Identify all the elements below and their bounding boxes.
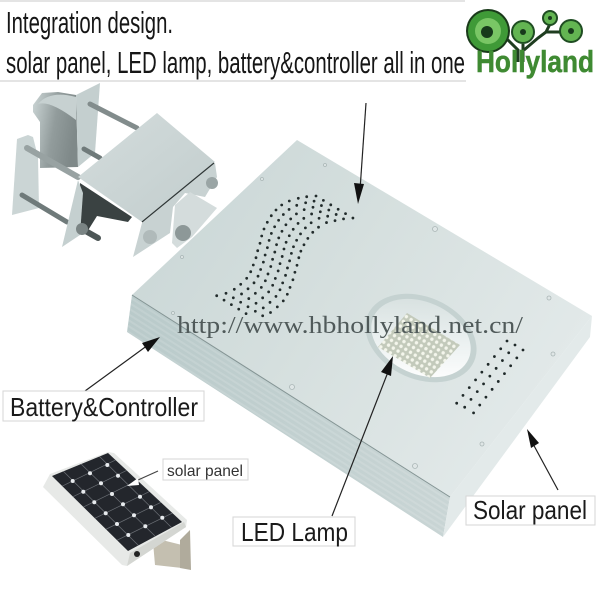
frame bbox=[43, 452, 187, 566]
front-left plate bbox=[62, 180, 83, 247]
inset: small solar panel product bbox=[40, 448, 248, 570]
screws bbox=[172, 164, 555, 468]
mount bracket bbox=[153, 540, 182, 568]
rods bbox=[27, 148, 78, 177]
arrow: solar panel side bbox=[527, 429, 558, 490]
inset: small solar panel product: solar panel bbox=[167, 463, 243, 480]
website URL: http://www.hbhollyland.net.cn/ bbox=[177, 312, 523, 339]
label: solar panel bbox=[163, 459, 248, 480]
arrow: top to solar panel bbox=[354, 103, 366, 204]
pipe saddle bbox=[33, 92, 78, 168]
mounting bracket bbox=[12, 83, 218, 257]
label: LED Lamp: LED Lamp bbox=[241, 517, 348, 547]
flange bbox=[133, 163, 217, 257]
upper rods bbox=[90, 104, 137, 128]
side face: right bbox=[443, 316, 592, 537]
LED lamp bbox=[351, 277, 491, 399]
hinge bbox=[172, 192, 217, 248]
side face: battery and controller bbox=[127, 295, 450, 537]
title panel bbox=[0, 1, 466, 81]
lamp body bbox=[127, 140, 592, 537]
arrow bbox=[138, 471, 158, 480]
label: Battery&Controller: Battery&Controller bbox=[10, 392, 198, 422]
nut and bolt bbox=[82, 229, 98, 238]
heading: Integration design. bbox=[6, 5, 173, 40]
top plate bbox=[78, 113, 215, 222]
arrow: battery and controller bbox=[85, 337, 160, 391]
photovoltaic surface bbox=[52, 453, 182, 551]
rear plate bbox=[76, 83, 100, 167]
cell highlights bbox=[71, 463, 164, 537]
arrow: LED lamp bbox=[332, 356, 393, 516]
right vent holes bbox=[452, 341, 523, 420]
logo: Hollyland bbox=[466, 9, 594, 79]
top face bbox=[132, 140, 592, 497]
S-shaped speaker holes bbox=[217, 196, 354, 317]
left plate bbox=[12, 135, 39, 215]
dark underside bbox=[78, 183, 132, 232]
